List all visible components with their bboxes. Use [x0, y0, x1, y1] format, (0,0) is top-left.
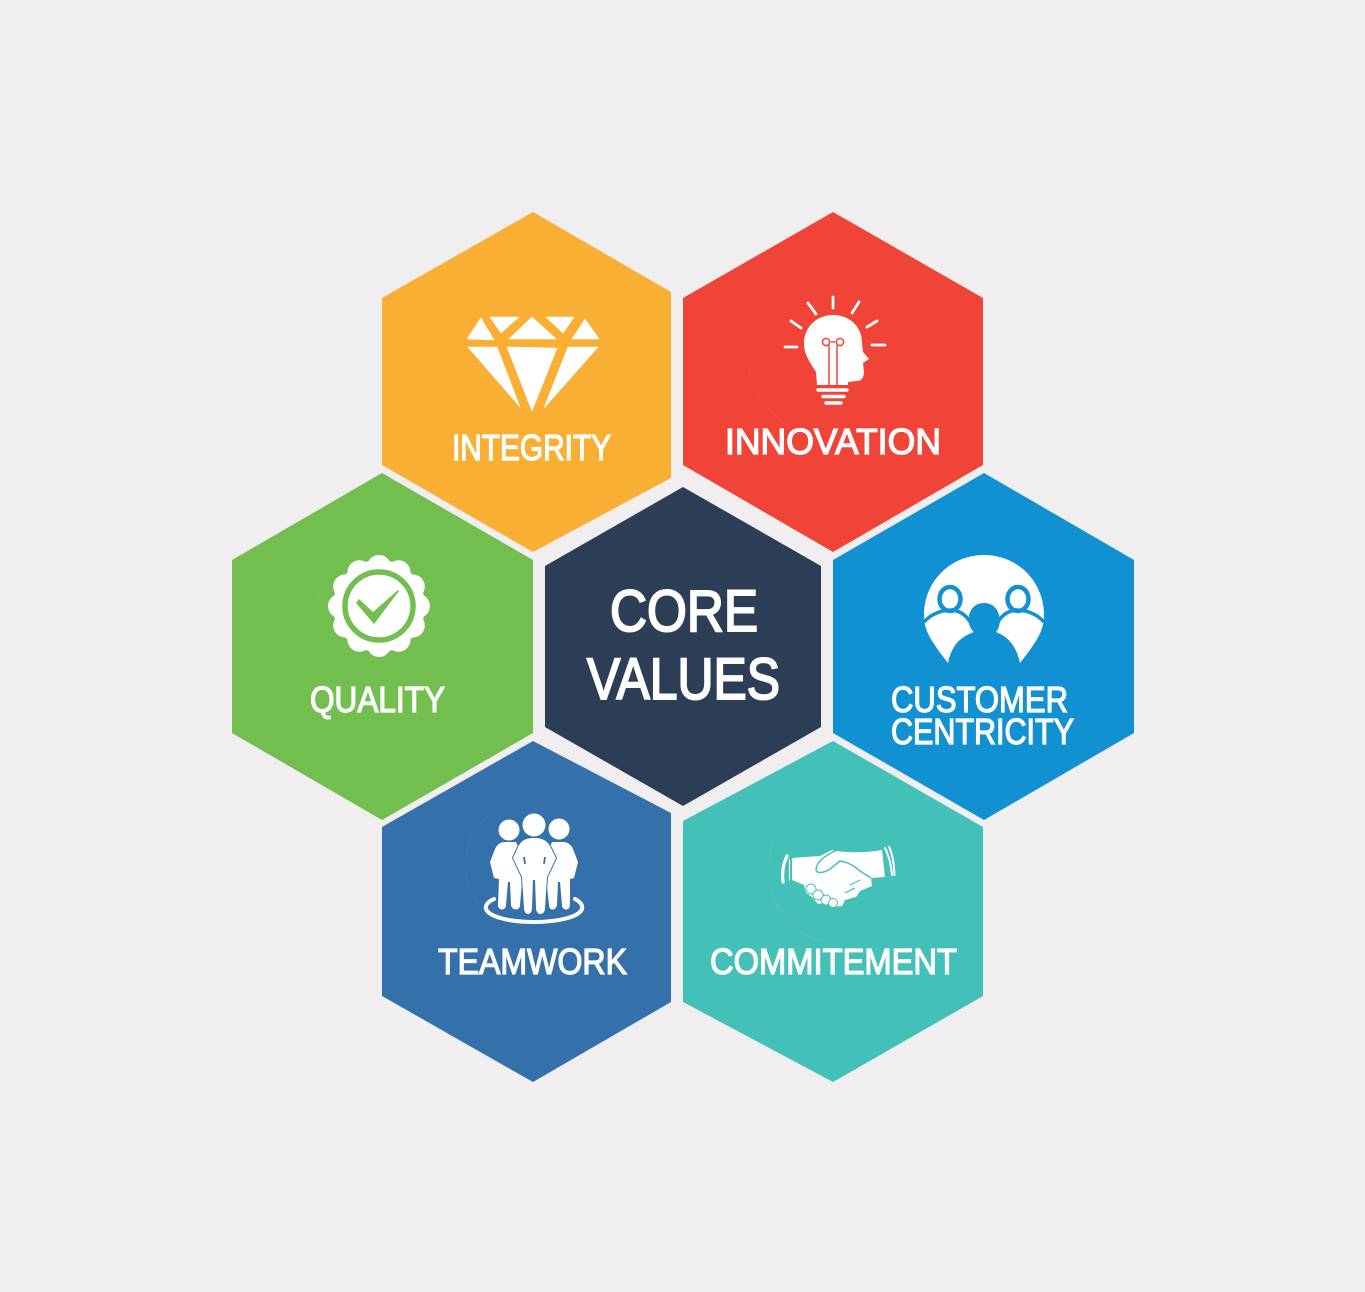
label: teamwork: TEAMWORK: [438, 941, 627, 982]
label: innovation: INNOVATION: [725, 421, 941, 462]
panel: integrity: [382, 212, 671, 552]
icon: light bulb head: [785, 297, 885, 403]
label: quality: QUALITY: [310, 679, 445, 720]
icon: quality badge: [328, 555, 430, 657]
label: integrity: INTEGRITY: [452, 427, 611, 468]
panel: innovation: [683, 212, 983, 552]
heading: core: CORE: [610, 579, 758, 644]
icon: customer group: [924, 555, 1044, 663]
heading: values: VALUES: [587, 647, 780, 712]
panel: teamwork: [382, 741, 671, 1082]
panel: quality: [232, 473, 533, 820]
icon: handshake: [783, 847, 894, 908]
icon: team of three: [486, 814, 582, 922]
label: customer: CUSTOMER: [891, 679, 1068, 720]
panel: customer centricity: [833, 473, 1134, 820]
label: commitement: COMMITEMENT: [710, 941, 957, 982]
icon: diamond: [467, 317, 599, 411]
label: centricity: CENTRICITY: [891, 711, 1074, 752]
panel: commitment: [683, 741, 983, 1082]
panel: core values: [545, 487, 821, 806]
